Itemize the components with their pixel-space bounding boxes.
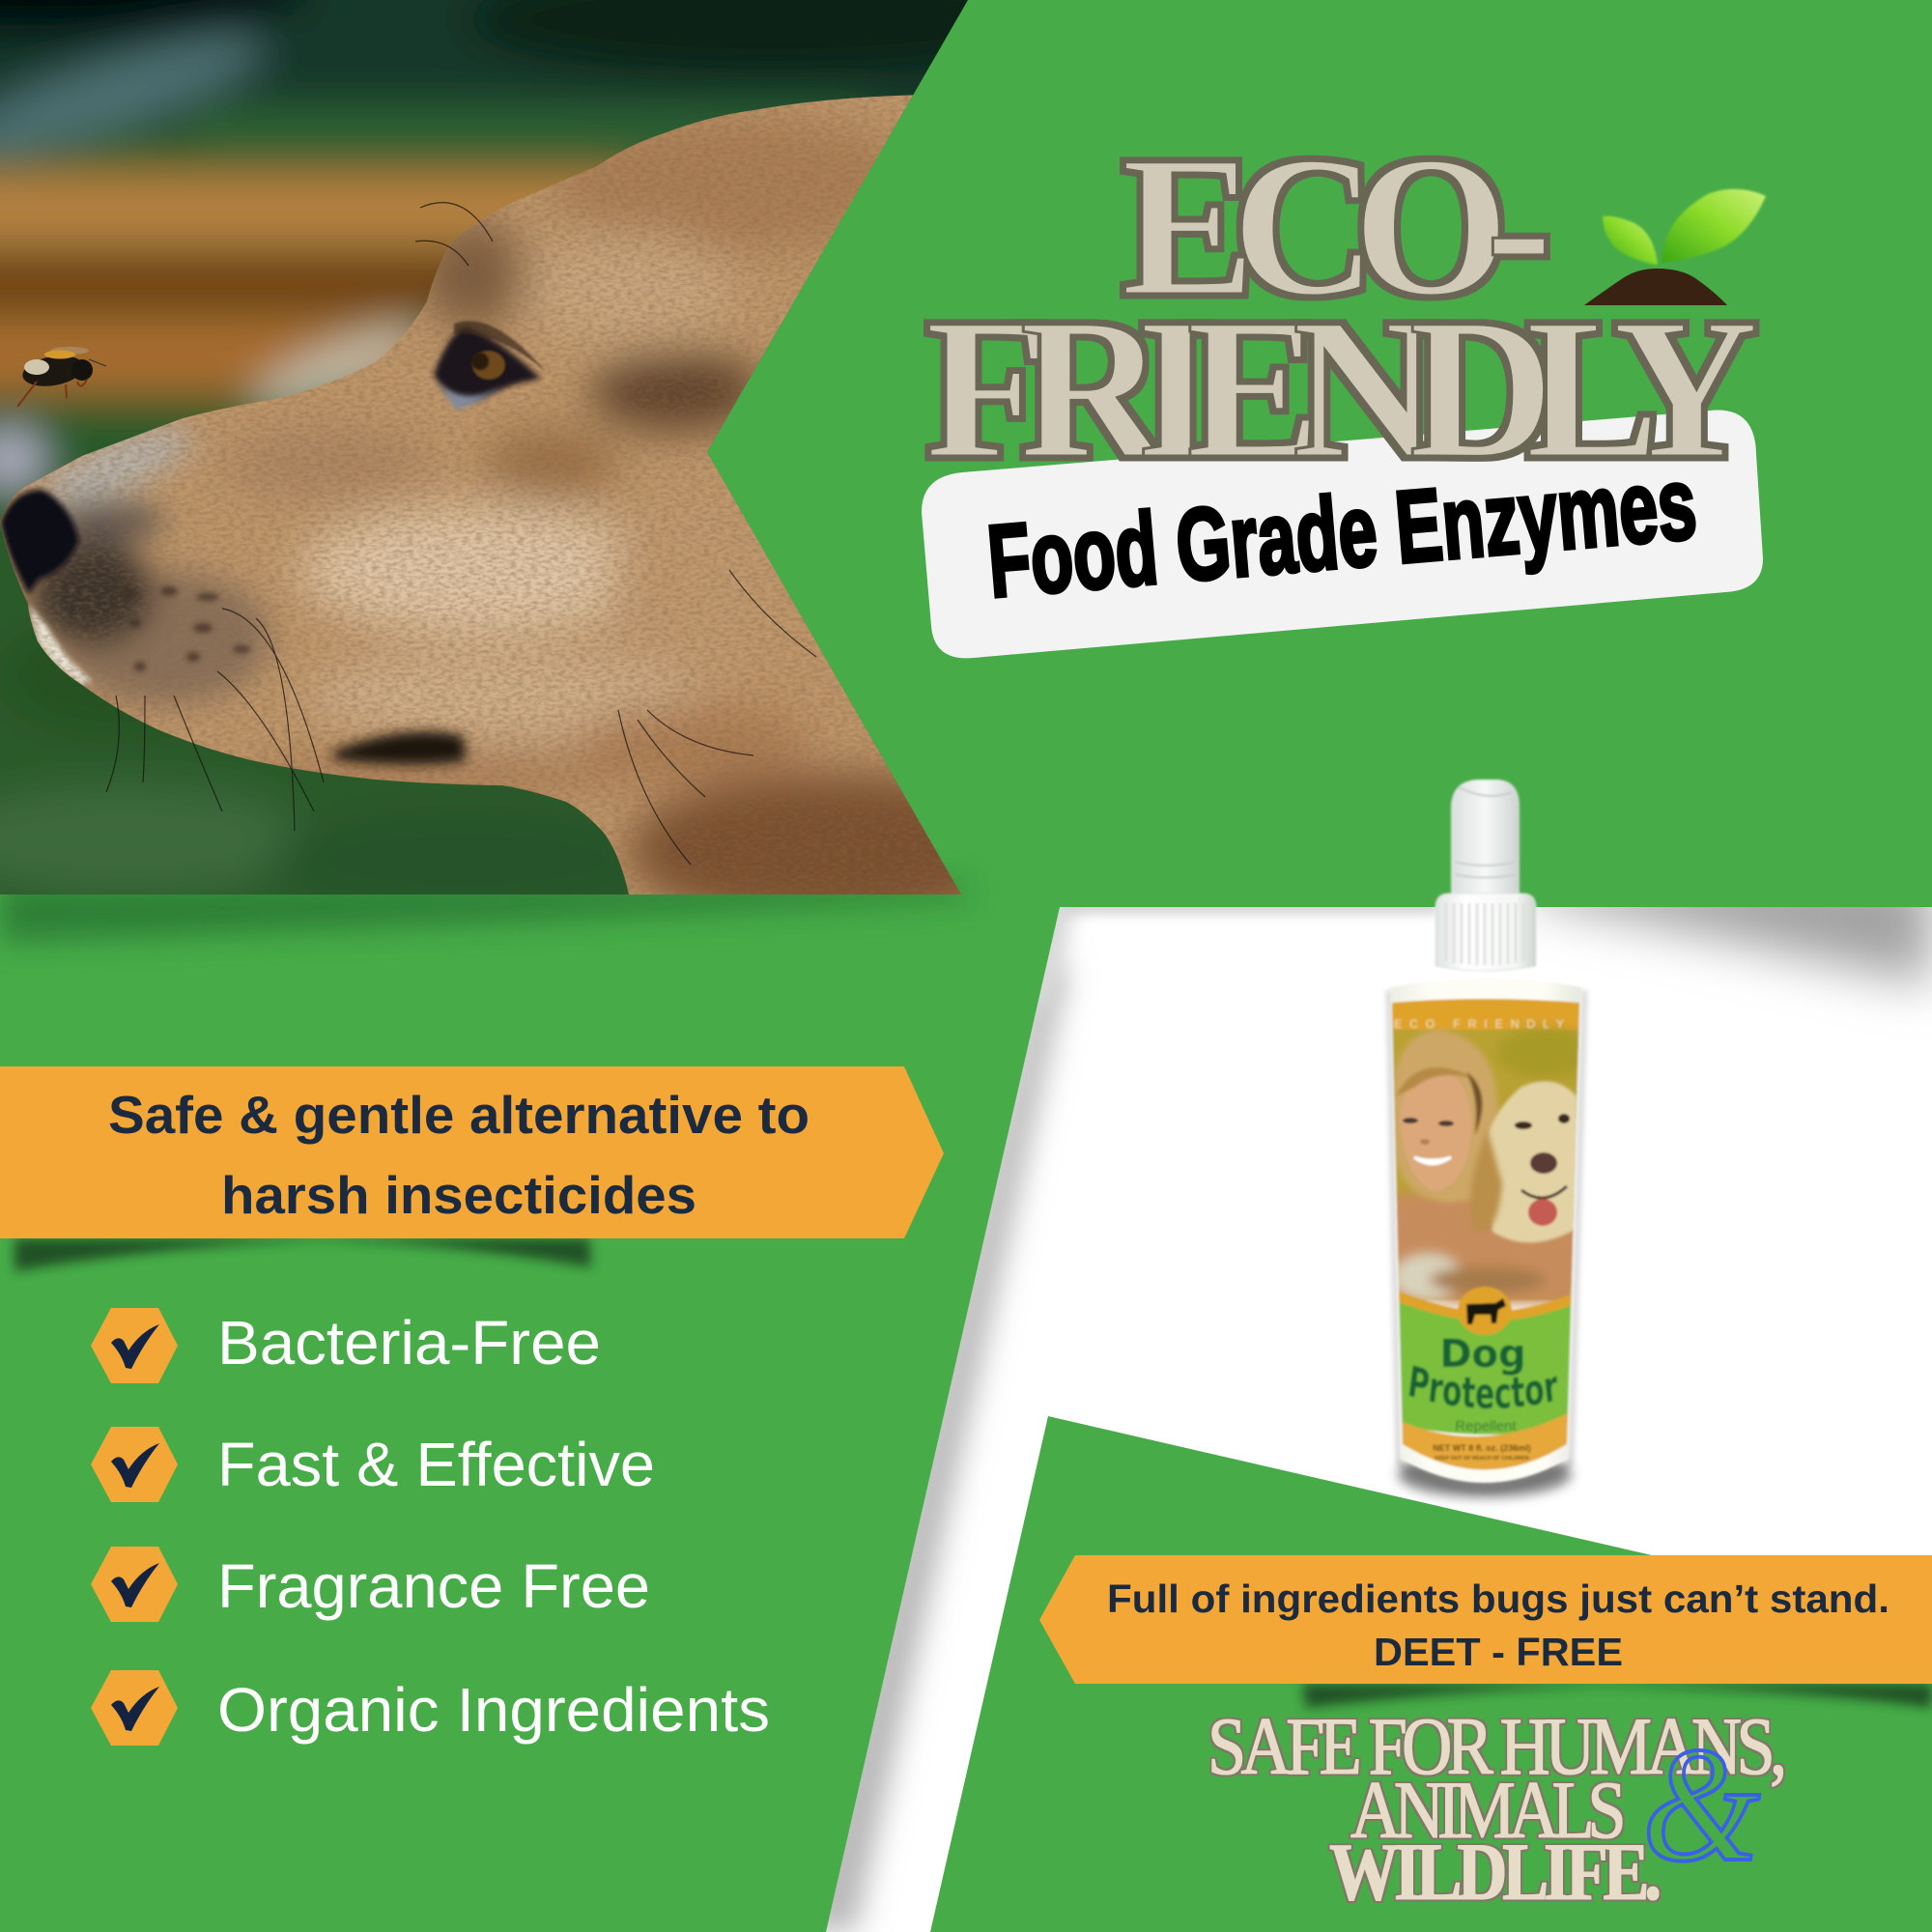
dog fur texture bbox=[0, 77, 985, 908]
checklist bbox=[91, 1308, 770, 1746]
chin white fur bbox=[28, 604, 92, 685]
tagline: safe for humans, animals and wildlife: WILDLIFE. bbox=[1329, 1828, 1662, 1918]
banner: full of ingredients bbox=[1039, 1555, 1932, 1684]
shadow: right banner bbox=[1302, 1684, 1932, 1708]
dog mouth line bbox=[333, 732, 466, 765]
banner: safe and gentle: harsh insecticides bbox=[221, 1165, 696, 1225]
dog nose bbox=[0, 490, 79, 594]
icon: sprout in soil bbox=[1584, 189, 1766, 305]
banner: safe and gentle bbox=[0, 1066, 944, 1238]
item: fragrance free: Fragrance Free bbox=[217, 1551, 650, 1621]
title: ECO-FRIENDLY: ECO- bbox=[1122, 115, 1552, 337]
label: food grade pill bbox=[922, 411, 1763, 658]
item: bacteria-free: Bacteria-Free bbox=[217, 1308, 601, 1378]
panel: left green benefits panel bbox=[0, 895, 1060, 1932]
shadow under photo bbox=[0, 884, 968, 942]
bottle label text: ECO FRIENDLY bbox=[1394, 1017, 1572, 1031]
tagline: safe for humans, animals and wildlife: ANIMALS bbox=[1350, 1766, 1627, 1856]
dog whiskers bbox=[106, 203, 816, 865]
product: spray bottle: KEEP OUT OF REACH OF CHILDREN bbox=[1435, 1456, 1529, 1462]
bottle label bbox=[1391, 997, 1580, 1471]
item: organic ingredients: Organic Ingredients bbox=[217, 1675, 770, 1745]
banner: full of ingredients: Full of ingredients bugs just can’t stand. bbox=[1107, 1577, 1889, 1621]
product: spray bottle: Dog bbox=[1439, 1332, 1526, 1377]
banner: full of ingredients: DEET - FREE bbox=[1374, 1630, 1623, 1674]
ampersand: & bbox=[1642, 1714, 1760, 1895]
item: bacteria-free bbox=[91, 1308, 601, 1383]
tagline: safe for humans, animals and wildlife: SAFE FOR HUMANS, bbox=[1208, 1702, 1787, 1792]
product: spray bottle: Protector bbox=[1408, 1364, 1558, 1410]
product: spray bottle: Repellent bbox=[1455, 1418, 1518, 1435]
gold bottom band bbox=[1401, 1412, 1569, 1471]
dog head bbox=[0, 95, 961, 895]
dog badge bbox=[1458, 1287, 1512, 1335]
title: ECO-FRIENDLY bbox=[925, 115, 1758, 499]
panel: bottom right green panel bbox=[930, 1416, 1932, 1932]
dog eye bbox=[434, 321, 546, 410]
title: ECO-FRIENDLY: FRIENDLY bbox=[925, 277, 1758, 499]
woman's hair bbox=[1393, 1030, 1498, 1203]
item: fast and effective: Fast & Effective bbox=[217, 1430, 655, 1499]
woman's face bbox=[1396, 1067, 1482, 1192]
green label area bbox=[1398, 1301, 1573, 1436]
product: spray bottle: NET WT 8 fl. oz. (236ml) bbox=[1433, 1443, 1531, 1453]
shadow: left banner bbox=[14, 1238, 591, 1271]
photo: dog and bee bbox=[0, 0, 968, 895]
product: spray bottle bbox=[1384, 778, 1589, 1506]
panel: top green header band bbox=[707, 0, 1932, 907]
bee bbox=[17, 347, 106, 407]
tagline: safe for humans, animals and wildlife bbox=[1208, 1702, 1787, 1918]
labrador on label bbox=[1470, 1081, 1579, 1242]
banner: safe and gentle: Safe & gentle alternative to bbox=[108, 1085, 810, 1145]
panel: white product area bbox=[773, 869, 1932, 1932]
